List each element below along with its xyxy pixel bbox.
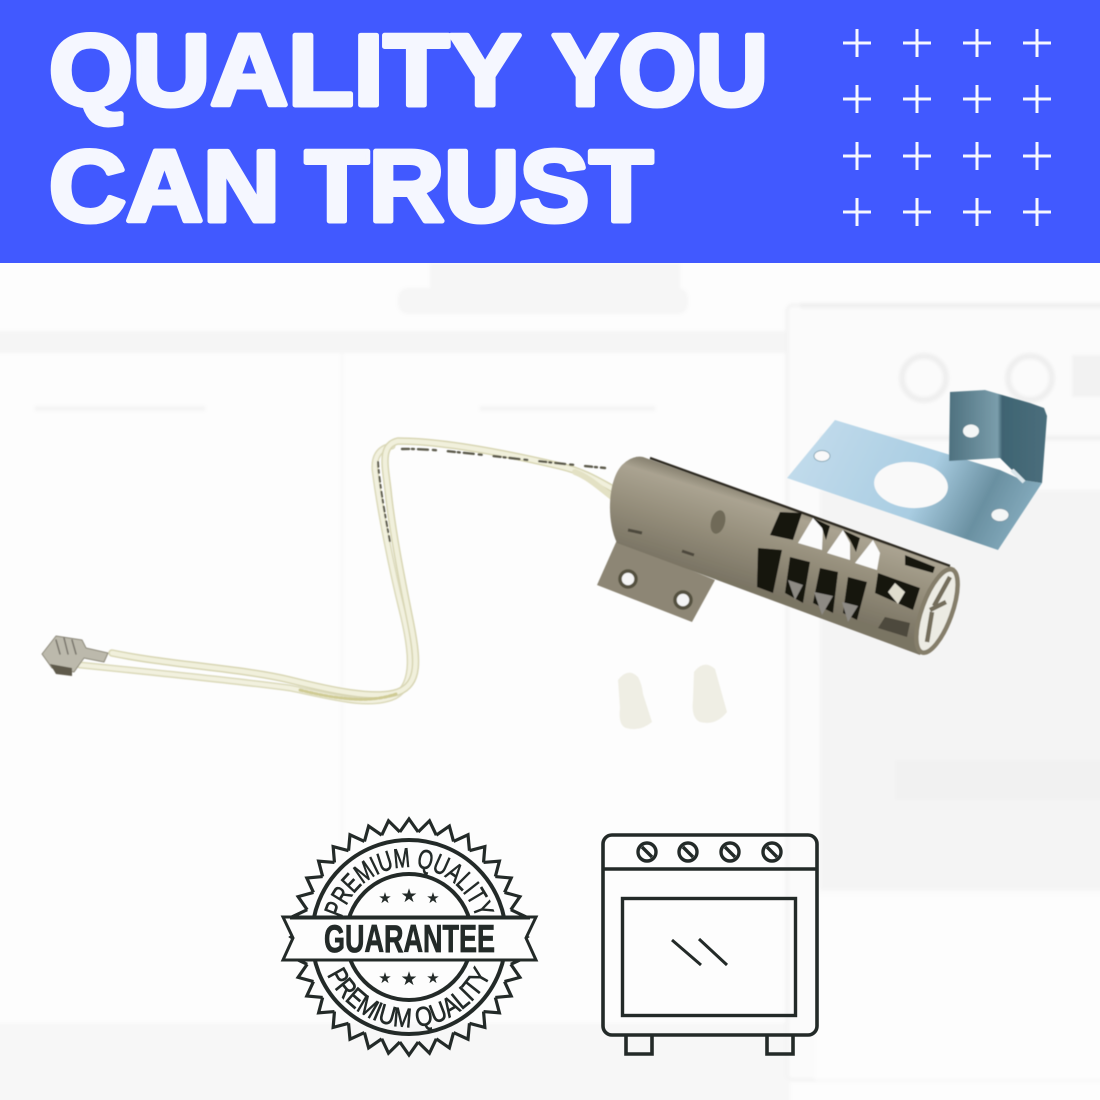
title: QUALITY <box>49 15 521 127</box>
title: YOU <box>552 15 768 127</box>
header banner <box>0 0 1100 263</box>
badge stars: ★ <box>400 885 418 907</box>
badge stars: ★ <box>400 968 418 990</box>
cylinder <box>610 457 955 655</box>
faded kitchen background <box>0 263 1100 1100</box>
badge stars: ★ <box>378 969 392 987</box>
title: CAN <box>49 131 280 243</box>
cage windows <box>757 512 935 620</box>
title: TRUST <box>305 131 653 243</box>
badge stars <box>378 885 440 990</box>
icon: oven <box>603 835 817 1054</box>
badge stars: ★ <box>426 889 440 907</box>
product: igniter body <box>597 457 966 657</box>
product: ceramic caps <box>618 665 727 729</box>
title <box>49 15 768 243</box>
badge arc text: PREMIUM QUALITY <box>324 848 494 916</box>
ribbon: GUARANTEE <box>324 918 495 961</box>
wire terminal <box>42 636 108 676</box>
product: mounting bracket <box>787 390 1047 550</box>
product: igniter wire <box>42 441 615 701</box>
badge stars: ★ <box>426 969 440 987</box>
badge stars: ★ <box>378 889 392 907</box>
badge: premium quality guarantee <box>280 816 538 1058</box>
plus sign grid <box>843 29 1051 226</box>
mounting flange <box>597 540 715 622</box>
badge arc text: PREMIUM QUALITY <box>327 966 488 1030</box>
oven knobs <box>638 843 781 861</box>
end cap <box>908 565 966 657</box>
badge arc text <box>324 848 494 1030</box>
